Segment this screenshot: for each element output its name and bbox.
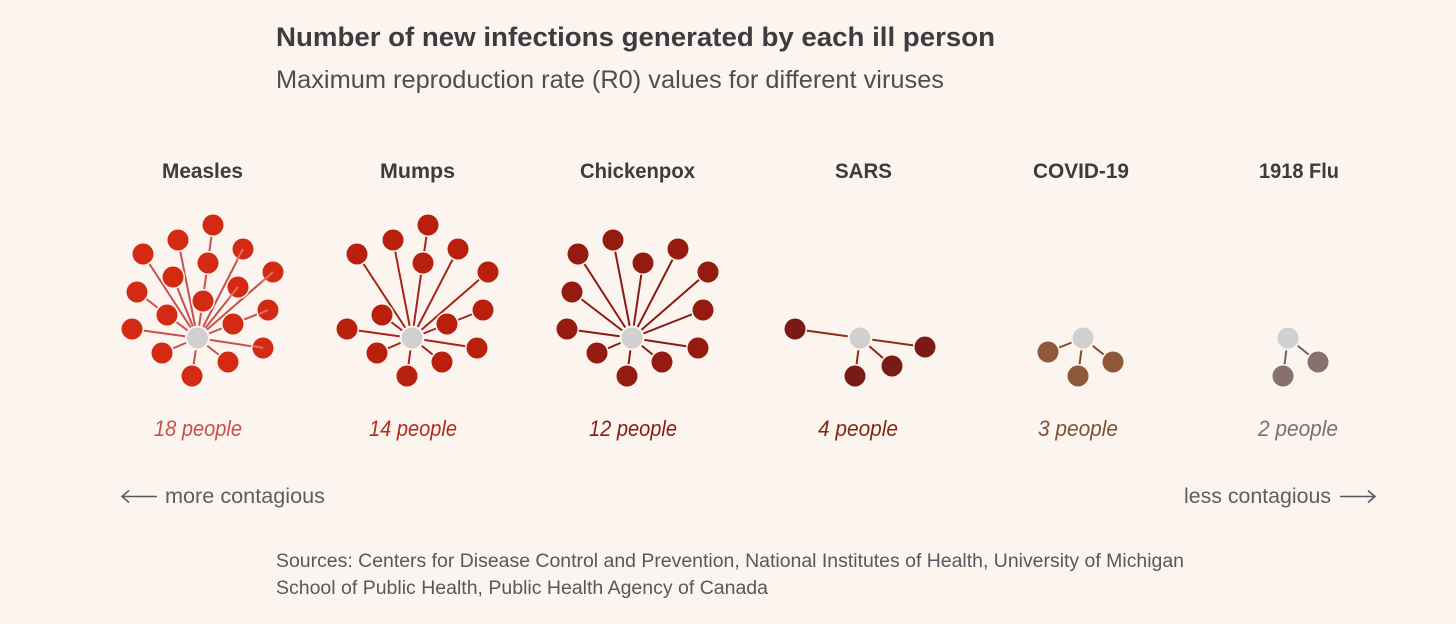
sources: Sources: Centers for Disease Control and Prevention, National Institutes of Health, University of Michigan — [276, 551, 1184, 572]
sources: School of Public Health, Public Health Agency of Canada — [276, 578, 768, 599]
arrow: less contagious — [1340, 490, 1375, 502]
label: 12 people: 12 people — [589, 416, 677, 441]
label: 4 people: 4 people — [818, 416, 898, 441]
label: 2 people: 2 people — [1257, 416, 1338, 441]
label: less contagious: less contagious — [1184, 485, 1331, 508]
heading: COVID-19: COVID-19 — [1033, 160, 1129, 183]
panel: 1918 flu — [1257, 160, 1339, 441]
subtitle: Maximum reproduction rate (R0) values for different viruses — [276, 66, 944, 94]
heading: mumps: Mumps — [380, 160, 455, 183]
sources — [276, 551, 1184, 599]
heading: measles: Measles — [162, 160, 243, 183]
panel: SARS — [783, 160, 937, 441]
heading: SARS: SARS — [835, 160, 892, 183]
panel: measles — [120, 160, 285, 441]
panel: COVID-19 — [1033, 160, 1129, 441]
network: measles, 18 people — [120, 213, 285, 388]
panel: chickenpox — [555, 160, 720, 441]
label: 14 people: 14 people — [369, 416, 457, 441]
arrow: more contagious — [122, 490, 157, 502]
title: Number of new infections generated by each ill person — [276, 22, 995, 52]
network: chickenpox, 12 people — [555, 228, 720, 388]
network: 1918 flu, 2 people — [1271, 326, 1330, 388]
network: COVID-19, 3 people — [1036, 326, 1125, 388]
label: more contagious: more contagious — [165, 485, 325, 508]
network: mumps, 14 people — [335, 213, 500, 388]
heading: 1918 flu: 1918 Flu — [1259, 160, 1339, 183]
network: SARS, 4 people — [783, 317, 937, 388]
panel: mumps — [335, 160, 500, 441]
heading: chickenpox: Chickenpox — [580, 160, 695, 183]
label: 3 people: 3 people — [1038, 416, 1118, 441]
label: 18 people: 18 people — [154, 416, 242, 441]
